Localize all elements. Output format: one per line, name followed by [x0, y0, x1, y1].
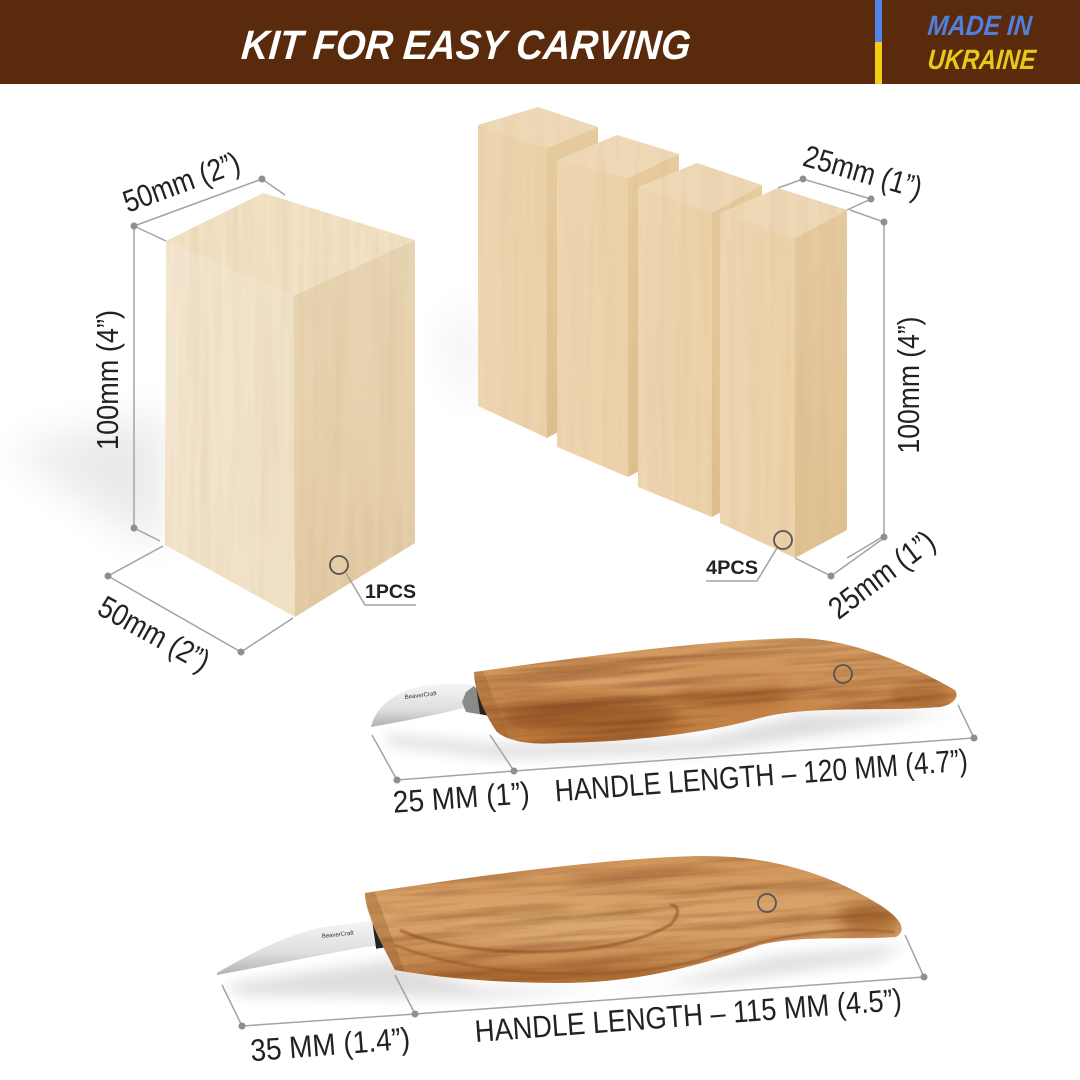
- logo on blade: BeaverCraft: [322, 931, 354, 940]
- dimensions: four blocks: 25mm (1”): [799, 138, 926, 206]
- marker: knife 1: [834, 665, 852, 683]
- blade: [217, 920, 386, 975]
- marker: knife 2: [758, 894, 776, 912]
- dimensions: large block: 50mm (2”): [92, 589, 216, 679]
- dimensions: knife 1: [372, 705, 978, 820]
- handle: [474, 638, 956, 744]
- dimensions: knife 2: HANDLE LENGTH – 115 MM (4.5”): [474, 982, 903, 1049]
- dimensions: four blocks: 25mm (1”): [822, 523, 942, 626]
- dimensions: knife 2: [222, 935, 928, 1068]
- title: KIT FOR EASY CARVING: [240, 22, 693, 68]
- panel: knife 2: [217, 856, 902, 1002]
- dimensions: large block: [90, 145, 293, 679]
- block 2: [557, 135, 679, 477]
- panel: knife 1: [371, 638, 956, 762]
- marker: 1pcs: [330, 556, 416, 605]
- header banner: [0, 0, 1080, 84]
- marker: 1pcs: 1PCS: [365, 582, 416, 603]
- panel: four wood blocks: [478, 107, 847, 582]
- dimensions: large block: 50mm (2”): [118, 145, 245, 219]
- dimensions: large block: 100mm (4”): [90, 310, 125, 450]
- made in ukraine label: MADE IN: [926, 10, 1034, 41]
- blade: [371, 684, 478, 727]
- icon: flag stripe: [875, 0, 882, 84]
- handle: [365, 856, 902, 983]
- logo on blade: BeaverCraft: [405, 691, 437, 701]
- marker: 4pcs: [706, 531, 792, 581]
- dimensions: four blocks: 100mm (4”): [891, 316, 926, 454]
- block 3: [638, 163, 762, 517]
- dimensions: four blocks: [778, 138, 942, 626]
- block 1: [478, 107, 598, 438]
- panel: large wood block: [8, 190, 420, 620]
- dimensions: knife 1: 25 MM (1”): [392, 775, 531, 820]
- made in ukraine label: UKRAINE: [926, 44, 1038, 75]
- block 4: [720, 188, 847, 558]
- made in ukraine label: [926, 10, 1038, 75]
- dimensions: knife 2: 35 MM (1.4”): [249, 1021, 411, 1068]
- marker: 4pcs: 4PCS: [706, 558, 758, 579]
- dimensions: knife 1: HANDLE LENGTH – 120 MM (4.7”): [553, 743, 969, 809]
